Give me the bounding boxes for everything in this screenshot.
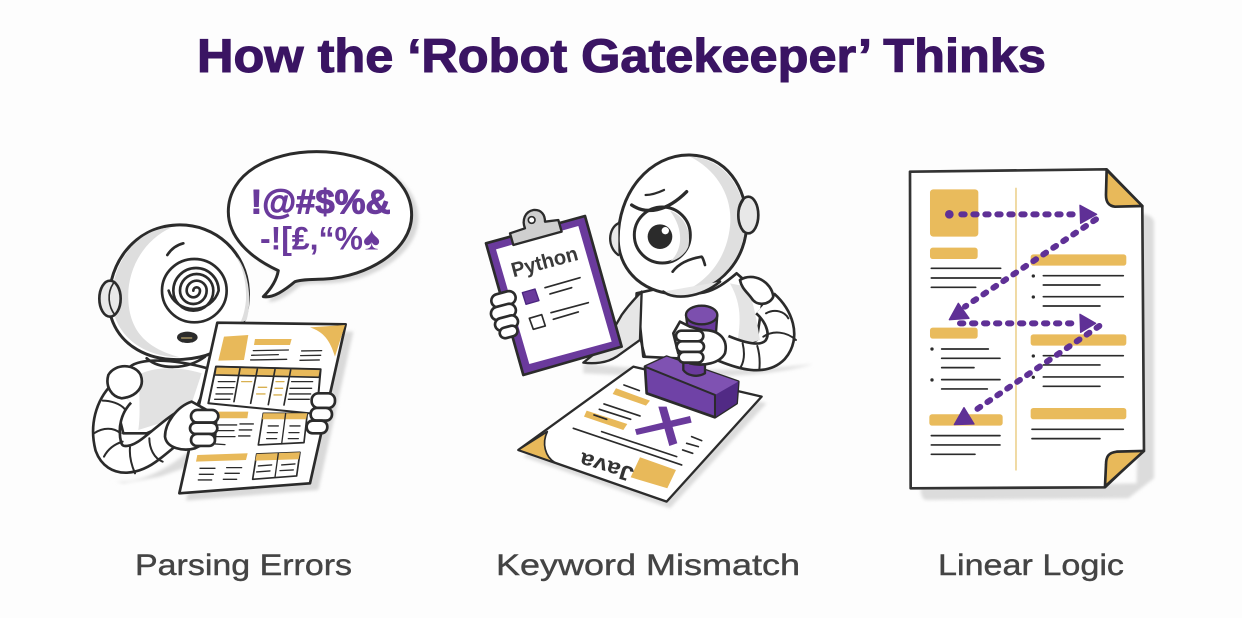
- robot body and arm: [94, 357, 213, 483]
- reject X mark: [635, 407, 692, 446]
- panel: linear logic illustration: [910, 169, 1154, 500]
- column divider: [1014, 188, 1018, 470]
- segmented arm tube: [723, 303, 781, 357]
- folded corners: [1105, 170, 1144, 487]
- panel: keyword mismatch illustration: [486, 155, 813, 508]
- far arm behind clipboard: [583, 292, 642, 363]
- label: linear logic: Linear Logic: [938, 549, 1124, 582]
- hand on clipboard: [489, 290, 519, 339]
- spiral eye: [162, 259, 227, 322]
- dotted reading path arrows: [945, 205, 1099, 425]
- label: keyword mismatch: Keyword Mismatch: [496, 549, 800, 582]
- highlighted headings and photo block: [929, 189, 1126, 426]
- resume page with tables: [179, 323, 353, 501]
- title: How the ‘Robot Gatekeeper’ Thinks: [197, 29, 1046, 82]
- rejected java resume: [518, 367, 767, 508]
- speech bubble: [228, 152, 418, 302]
- mouth: [177, 332, 198, 343]
- body text lines: [930, 268, 1123, 454]
- clipboard with Python text: Python: [509, 242, 581, 282]
- speech bubble: -![₤,“%♠: [260, 220, 380, 256]
- robot body and arm: [583, 273, 813, 377]
- robot head: [610, 155, 758, 297]
- clipboard with Python text: [486, 210, 622, 375]
- hand on stamp: [673, 322, 726, 365]
- label: parsing errors: Parsing Errors: [135, 549, 352, 582]
- panel: parsing errors illustration: [94, 152, 418, 501]
- robot head: [99, 225, 249, 360]
- rejected java resume: Java: [577, 447, 636, 486]
- page shadow: [921, 213, 1154, 500]
- ears: [738, 197, 758, 233]
- ear: [99, 281, 121, 317]
- resume page: [910, 169, 1144, 488]
- purple stamp and hand: [645, 306, 738, 417]
- segmented arm tube: [106, 393, 190, 459]
- frown: [673, 257, 705, 272]
- speech bubble: !@#$%&: [251, 183, 391, 221]
- angry eye: [634, 207, 690, 263]
- robot hands: [165, 393, 335, 450]
